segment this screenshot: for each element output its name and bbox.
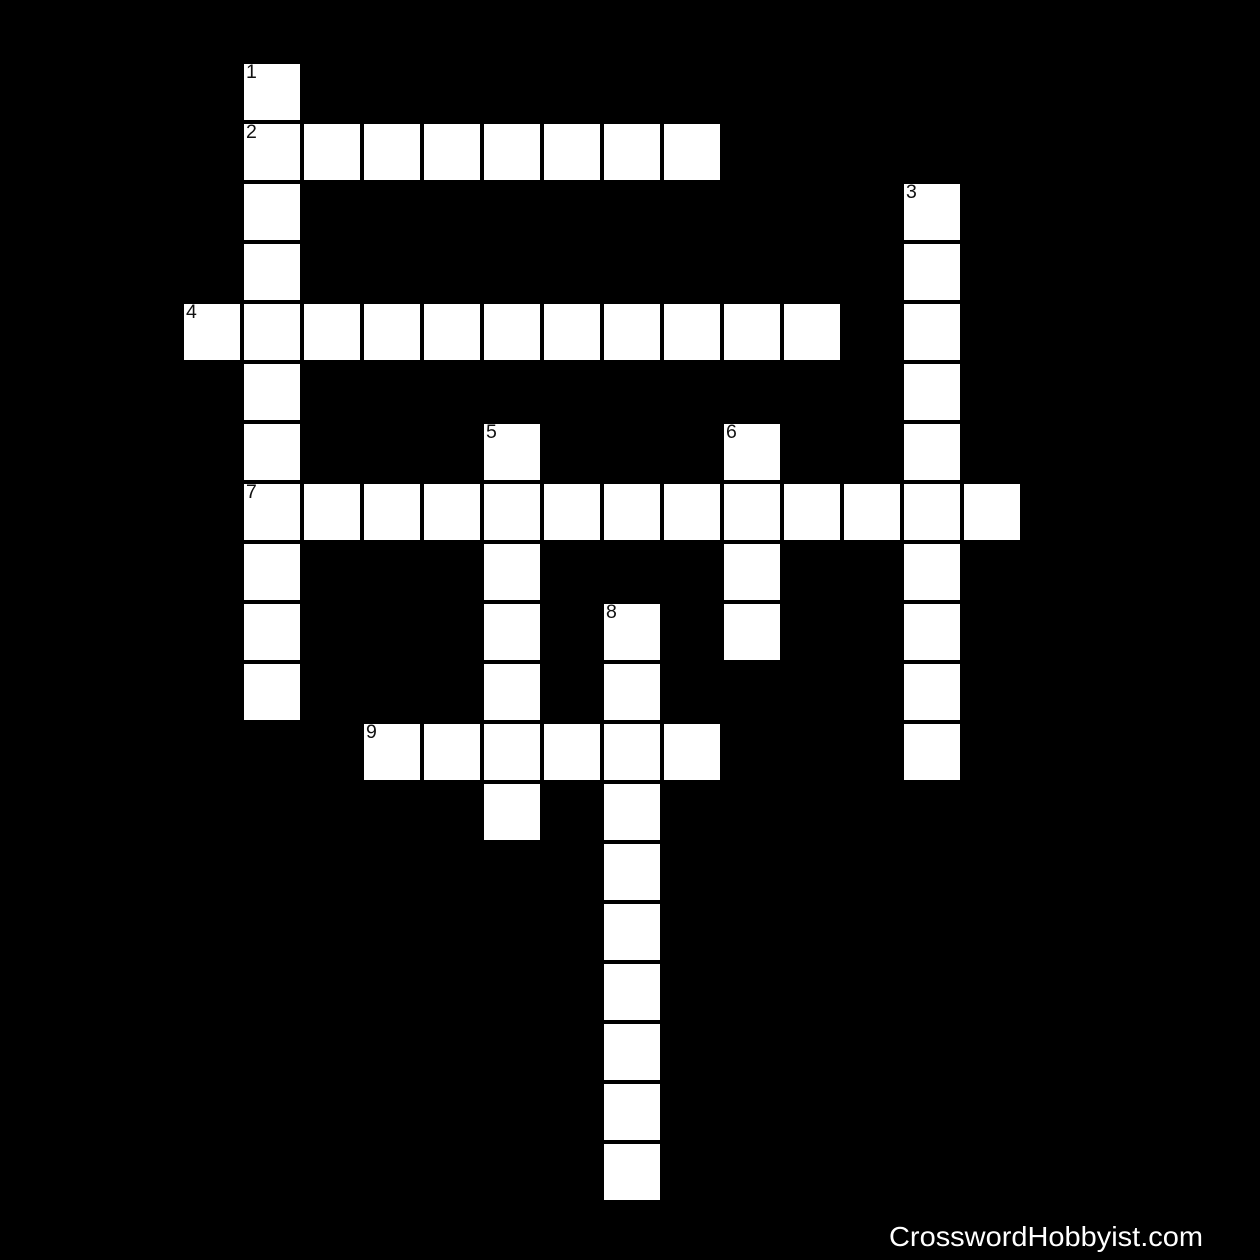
word 7 across <box>244 484 1020 540</box>
clue numbers: 3 <box>906 181 917 203</box>
word 3 down <box>904 184 960 780</box>
clue numbers: 8 <box>606 601 617 623</box>
word 5 down <box>484 424 540 840</box>
clue numbers: 4 <box>186 301 197 323</box>
clue numbers: 1 <box>246 61 257 83</box>
word 6 down <box>724 424 780 660</box>
word 2 across <box>244 124 720 180</box>
clue numbers: 9 <box>366 721 377 743</box>
crossword grid <box>184 64 1020 1200</box>
clue numbers: 6 <box>726 421 737 443</box>
word 4 across <box>184 304 840 360</box>
clue numbers: 5 <box>486 421 497 443</box>
footer site credit: CrosswordHobbyist.com <box>889 1221 1203 1252</box>
word 8 down <box>604 604 660 1200</box>
clue numbers <box>186 61 917 743</box>
word 9 across <box>364 724 720 780</box>
word 1 down <box>244 64 300 720</box>
clue numbers: 2 <box>246 121 257 143</box>
clue numbers: 7 <box>246 481 257 503</box>
